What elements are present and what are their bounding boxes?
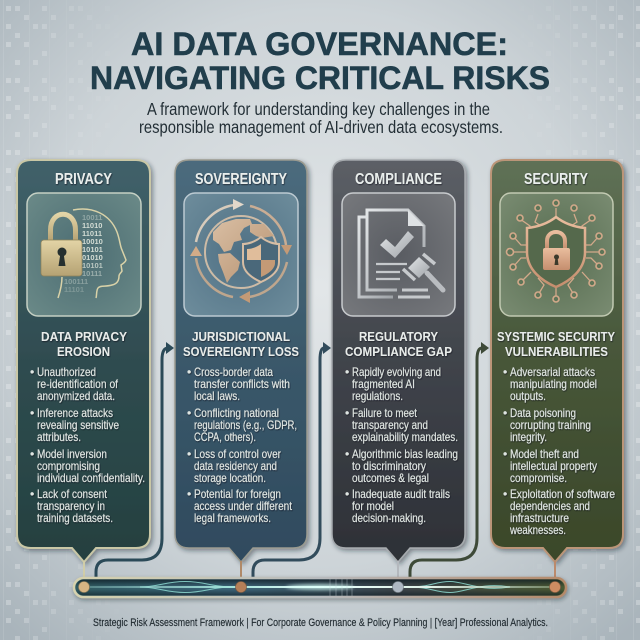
icon: lock and head: 10010 (82, 237, 103, 246)
bullet list: sovereignty: • (187, 406, 191, 420)
bullet list: sovereignty: legal frameworks. (194, 511, 271, 525)
bullet list: privacy: Inference attacks (37, 406, 113, 420)
subtitle: responsible management of AI-driven data ecosystems. (139, 117, 503, 137)
panel: sovereignty (175, 160, 307, 562)
center glow (286, 579, 354, 596)
bullet list: security: Adversarial attacks (510, 365, 595, 379)
signal line (90, 586, 550, 588)
bullet list: security: weaknesses. (509, 523, 566, 537)
bullet list: compliance: • (345, 487, 349, 501)
bullet list: sovereignty: Cross-border data (194, 365, 273, 379)
bullet list: privacy: compromising (37, 459, 100, 473)
bullet list: privacy: training datasets. (37, 511, 113, 525)
bullet list: security (503, 365, 615, 537)
icon: lock and head: 100111 (64, 277, 88, 286)
bullet list: compliance: decision-making. (352, 511, 426, 525)
icon box: compliance (342, 193, 455, 316)
icon: lock and head: 10011 (82, 213, 102, 222)
bullet list: privacy: Model inversion (37, 447, 107, 461)
card: privacy (17, 160, 150, 562)
bullet list: security: • (503, 447, 507, 461)
bullet list: security: intellectual property (510, 459, 597, 473)
bullet list: sovereignty: Loss of control over (194, 447, 281, 461)
subheading: security: SYSTEMIC SECURITY (497, 329, 615, 344)
bullet list: sovereignty: data residency and (194, 459, 277, 473)
subheading: compliance: COMPLIANCE GAP (345, 344, 452, 359)
heading: security: SECURITY (524, 171, 588, 188)
bullet list: privacy: Lack of consent (37, 487, 108, 501)
bullet list: compliance: Algorithmic bias leading (352, 447, 458, 461)
bullet list: sovereignty (187, 365, 297, 525)
bullet list: sovereignty: Potential for foreign (194, 487, 281, 501)
subheading: privacy: EROSION (57, 344, 110, 359)
bullet list: compliance: • (345, 447, 349, 461)
arrow: sovereignty to compliance (253, 348, 324, 577)
panel: compliance (332, 160, 465, 562)
icon: lock and head (41, 209, 126, 298)
bullet list: security: dependencies and (510, 499, 590, 513)
bullet list: compliance: Inadequate audit trails (352, 487, 450, 501)
subheading: sovereignty: JURISDICTIONAL (192, 329, 290, 344)
bullet list: security: manipulating model (510, 377, 597, 391)
arrow: compliance to security (410, 348, 482, 577)
heading: sovereignty: SOVEREIGNTY (195, 171, 287, 188)
bullet list: sovereignty: transfer conflicts with (194, 377, 290, 391)
bullet list: privacy: • (30, 487, 34, 501)
icon: globe and shield (190, 199, 292, 303)
subheading: compliance: REGULATORY (359, 329, 438, 344)
bar shading (76, 580, 564, 596)
bullet list: sovereignty: CCPA, others). (194, 430, 256, 444)
arrow head: sovereignty (166, 342, 174, 354)
bullet list: privacy (30, 365, 145, 525)
icon box: sovereignty (184, 193, 298, 316)
icon: lock and head: 10111 (82, 269, 102, 278)
bullet list: security: infrastructure (510, 511, 569, 525)
bullet list: privacy: • (30, 447, 34, 461)
bullet list: sovereignty: access under different (194, 499, 293, 513)
bullet list: security: • (503, 365, 507, 379)
bullet list: compliance: to discriminatory (352, 459, 426, 473)
bullet list: sovereignty: storage location. (194, 471, 266, 485)
bullet list: sovereignty: local laws. (194, 389, 240, 403)
title: AI DATA GOVERNANCE: (131, 26, 508, 62)
bullet list: privacy: anonymized data. (37, 389, 115, 403)
subtitle: A framework for understanding key challenges in the (147, 99, 490, 119)
heading: compliance: COMPLIANCE (355, 171, 442, 188)
bullet list: compliance: regulations. (352, 389, 403, 403)
bullet list: security: • (503, 487, 507, 501)
bullet list: sovereignty: • (187, 447, 191, 461)
bullet list: compliance: Rapidly evolving and (352, 365, 441, 379)
icon: lock and head: 10101 (82, 245, 103, 254)
title (90, 26, 550, 96)
panel: security (491, 160, 623, 562)
subheading: privacy (41, 329, 127, 359)
bullet list: sovereignty: regulations (e.g., GDPR, (194, 418, 297, 432)
bullet list: privacy: Unauthorized (37, 365, 96, 379)
arrow: privacy to sovereignty (96, 348, 168, 577)
bullet list: compliance: explainability mandates. (352, 430, 458, 444)
card: compliance (332, 160, 465, 562)
bullet list: privacy: attributes. (37, 430, 81, 444)
timeline bar (74, 578, 566, 597)
subtitle (139, 99, 503, 137)
bullet list: privacy: • (30, 365, 34, 379)
bullet list: security: Data poisoning (510, 406, 576, 420)
subheading: security: VULNERABILITIES (505, 344, 608, 359)
icon: lock and head: 11011 (82, 229, 102, 238)
signal waves (140, 582, 510, 592)
bullet list: privacy: re-identification of (37, 377, 119, 391)
subheading: sovereignty (183, 329, 299, 359)
bullet list: sovereignty: • (187, 365, 191, 379)
bullet list: security: Exploitation of software (510, 487, 615, 501)
subheading: compliance (345, 329, 452, 359)
panel: privacy (17, 160, 150, 562)
arrow head: security (481, 342, 489, 354)
bullet list: privacy: transparency in (37, 499, 105, 513)
icon: lock and head: 10101 (82, 261, 103, 270)
bullet list: compliance: outcomes & legal (352, 471, 429, 485)
icon box: security (500, 193, 613, 316)
bullet list: privacy: • (30, 406, 34, 420)
icon: lock and head: 11010 (82, 221, 102, 230)
nodes (78, 582, 560, 592)
bullet list: security: • (503, 406, 507, 420)
bullet list: compliance: Failure to meet (352, 406, 418, 420)
bullet list: security: integrity. (510, 430, 547, 444)
icon: document and gavel (359, 210, 443, 297)
bullet list: privacy: revealing sensitive (37, 418, 119, 432)
bullet list: security: compromise. (510, 471, 567, 485)
bullet list: compliance: • (345, 406, 349, 420)
bullet list: compliance: fragmented AI (352, 377, 415, 391)
bullet list: compliance: for model (352, 499, 394, 513)
bullet list: security: outputs. (510, 389, 546, 403)
icon: lock and head: 11101 (64, 285, 84, 294)
icon box: privacy (27, 193, 141, 316)
subheading: sovereignty: SOVEREIGNTY LOSS (183, 344, 299, 359)
connector lines (84, 561, 555, 587)
bullet list: compliance: transparency and (352, 418, 428, 432)
title: NAVIGATING CRITICAL RISKS (90, 60, 550, 96)
icon: lock and head: 01010 (82, 253, 103, 262)
subheading: privacy: DATA PRIVACY (41, 329, 127, 344)
bullet list: compliance (345, 365, 458, 525)
card: security (491, 160, 623, 562)
subheading: security (497, 329, 615, 359)
bullet list: sovereignty: • (187, 487, 191, 501)
arrow head: compliance (323, 342, 331, 354)
heading: privacy: PRIVACY (55, 171, 112, 188)
icon: shield, lock and circuit (506, 200, 605, 302)
bullet list: privacy: individual confidentiality. (37, 471, 145, 485)
bullet list: compliance: • (345, 365, 349, 379)
bullet list: security: Model theft and (510, 447, 579, 461)
card: sovereignty (175, 160, 307, 562)
bullet list: sovereignty: Conflicting national (194, 406, 279, 420)
bullet list: security: corrupting training (510, 418, 591, 432)
